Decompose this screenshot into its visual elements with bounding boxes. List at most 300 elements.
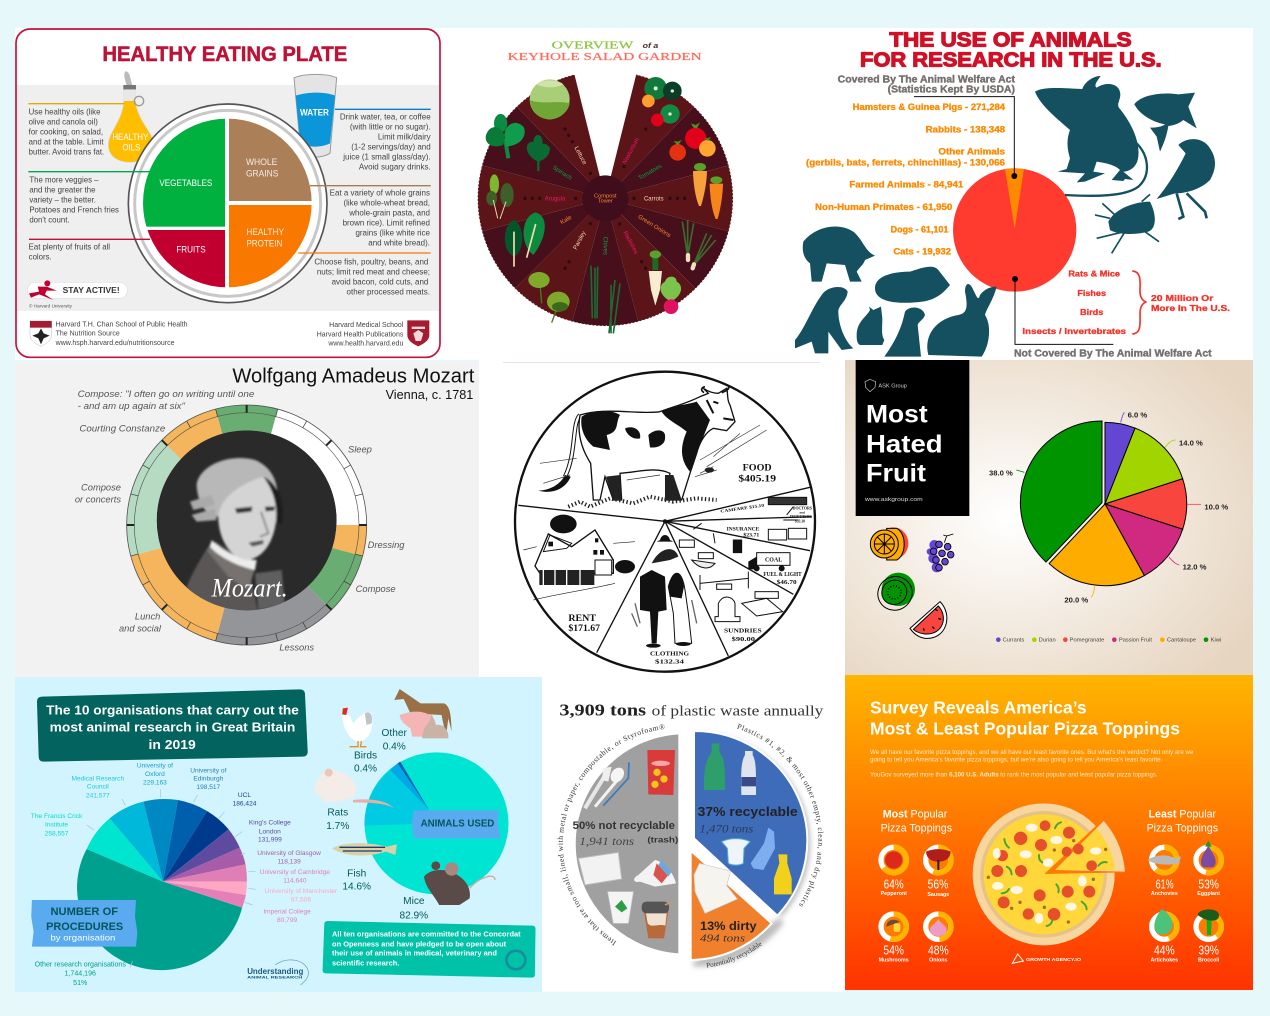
icon: kale	[505, 212, 545, 267]
title: overview: OVERVIEW	[552, 40, 634, 51]
pie chart: animals used	[364, 752, 508, 894]
pie labels: 1,941 tons	[579, 836, 635, 848]
stat: onions: 48%	[928, 942, 949, 957]
stat: eggplant: Eggplant	[1197, 891, 1220, 897]
label: number of procedures: by organisation	[50, 934, 115, 943]
labels: CLOTHING	[650, 650, 689, 657]
legend: Kiwi	[1211, 638, 1221, 644]
labels: $33.30	[795, 520, 805, 524]
covered list: Dogs - 61,101	[891, 224, 948, 234]
plant labels: Nasturtium	[622, 137, 641, 165]
curved caption: recyclable: Plastics #1, #2, & most other empty, clean, and dry plastics	[736, 724, 824, 907]
pie chart	[1020, 421, 1187, 586]
title bold part: 3,909 tons	[559, 701, 646, 720]
stay active badge: STAY ACTIVE!	[63, 285, 120, 295]
text: oils advice: for cooking, on salad,	[29, 127, 103, 136]
note box: scientific research.	[332, 959, 399, 968]
title: of a: of a	[643, 41, 658, 50]
activity labels: Dressing	[368, 540, 405, 550]
illustration: coal truck: COAL	[765, 557, 782, 563]
plate: HEALTHY	[246, 227, 284, 237]
stat: mushrooms: Mushrooms	[879, 957, 909, 963]
legend: Cantaloupe	[1167, 638, 1196, 644]
text: oils advice: olive and canola oil)	[29, 117, 98, 126]
organisation labels: 114,640	[283, 878, 307, 885]
icon: chives	[591, 266, 620, 333]
panel: animals in research	[795, 29, 1230, 360]
stat: artichokes: Artichokes	[1151, 957, 1178, 963]
text: water advice: Drink water, tea, or coffee	[340, 113, 431, 122]
icon: oil bottle	[108, 71, 153, 162]
covered list: Non-Human Primates - 61,950	[815, 202, 952, 212]
activity labels: or concerts	[75, 494, 121, 504]
pie labels: (trash)	[647, 835, 678, 845]
footer: medical school: Harvard Health Publications	[317, 331, 404, 338]
text: water advice: (1-2 servings/day) and	[351, 143, 431, 152]
pie value labels: 14.0 %	[1179, 439, 1203, 448]
organisation labels: Council	[87, 784, 109, 791]
icon: horse	[394, 689, 452, 737]
stat: pepperoni: 64%	[884, 876, 904, 891]
labels: $132.34	[655, 658, 685, 665]
footer: medical school: www.health.harvard.edu	[327, 341, 403, 348]
footer: medical school: Harvard Medical School	[329, 322, 404, 329]
title: Wolfgang Amadeus Mozart	[232, 365, 475, 388]
animal silhouettes	[795, 76, 1215, 357]
stat: pepperoni	[881, 847, 907, 897]
title line two: Most & Least Popular Pizza Toppings	[870, 718, 1180, 738]
intro text: going to tell you America's favorite pizza toppings, but we're also going to tell you America's least favorite.	[870, 758, 1163, 764]
labels: INSURANCE	[727, 528, 760, 533]
pie chart: procedures by organisation	[77, 789, 256, 970]
stat: artichokes: 44%	[1154, 942, 1175, 957]
plant labels: Tomatoes	[638, 164, 663, 182]
title: keyhole salad garden: KEYHOLE SALAD GARDEN	[508, 52, 702, 63]
black title card: Hated	[866, 431, 943, 458]
pie labels	[573, 805, 798, 945]
stat: anchovies	[1148, 847, 1181, 897]
curved caption: dirty: Potentially recyclable	[706, 942, 762, 968]
intro text: We all have our favorite pizza toppings, and we all have our least favorite ones. But what's the verdict? Not only are we	[870, 750, 1194, 756]
animal share labels: 82.9%	[399, 910, 428, 921]
stat: onions: Onions	[929, 957, 948, 963]
icon: watermelon	[910, 602, 947, 638]
text: oils advice: Use healthy oils (like	[29, 107, 100, 116]
organisation labels: University of	[190, 767, 227, 774]
legend	[996, 637, 1221, 644]
text: vegetables advice: variety – the better.	[29, 195, 96, 204]
icon: mouse	[1035, 76, 1147, 196]
uncovered list	[1022, 269, 1230, 336]
stat: anchovies: Anchovies	[1151, 891, 1178, 897]
plant labels	[545, 137, 671, 255]
text: water advice: juice (1 small glass/day).	[342, 153, 431, 162]
plant labels: Kale	[560, 215, 574, 226]
title line two: FOR RESEARCH IN THE U.S.	[860, 49, 1162, 72]
uncovered list: Rats & Mice	[1068, 269, 1120, 279]
footer: public health: Harvard T.H. Chan School of Public Health	[56, 321, 188, 328]
illustration: clothing	[632, 535, 697, 648]
uncovered list: More In The U.S.	[1151, 303, 1230, 313]
organisation labels: Institute	[45, 822, 68, 829]
understanding animal research logo	[247, 960, 308, 985]
text: grains advice: Eat a variety of whole grains	[330, 189, 430, 198]
panel: healthy eating plate	[16, 29, 440, 357]
heading: least popular: Least Popular	[1149, 808, 1216, 820]
animal share labels: Rats	[327, 808, 348, 819]
uncovered list: 20 Million Or	[1151, 293, 1214, 303]
panel: pizza toppings	[845, 675, 1253, 990]
icon: cutlery and straw	[585, 762, 629, 808]
footer: public health: www.hsph.harvard.edu/nutritionsource	[55, 340, 175, 347]
panel: uk animal research	[15, 677, 542, 992]
intro text: YouGov surveyed more than 6,100 U.S. Adults to rank the most popular and least popular pizza toppings.	[870, 772, 1158, 778]
organisation labels: The Francis Crick	[31, 813, 83, 820]
brace	[1132, 271, 1146, 334]
plant labels: Arugula	[545, 196, 566, 202]
organisation labels: University of	[137, 763, 173, 770]
intro text	[870, 750, 1194, 778]
plant labels: Parsley	[573, 230, 587, 251]
text: protein advice: other processed meats.	[347, 288, 430, 297]
plate: VEGETABLES	[159, 178, 212, 188]
text: protein advice: Choose fish, poultry, beans, and	[314, 258, 428, 267]
organisation labels: University of Glasgow	[257, 850, 321, 857]
animal share labels: 0.4%	[383, 741, 406, 752]
label: animals used	[412, 810, 501, 838]
organisation labels: UCL	[238, 792, 251, 799]
panel: family budget woodcut	[515, 372, 815, 672]
text: water advice: Avoid sugary drinks.	[359, 163, 431, 172]
labels: $171.67	[568, 623, 601, 633]
stat: onions	[926, 914, 951, 963]
plant labels: Radishes	[622, 230, 639, 255]
black title card: ASK Group	[878, 383, 907, 389]
text: oils advice: butter. Avoid trans fat.	[29, 148, 104, 157]
icon: monkey	[795, 287, 853, 353]
compost tower: Tower	[598, 199, 613, 205]
oil label line two: OILS	[122, 143, 140, 153]
label: number of procedures: PROCEDURES	[46, 921, 123, 933]
title rest: of plastic waste annually	[652, 704, 824, 720]
stat: broccoli	[1196, 909, 1221, 963]
plate: PROTEIN	[246, 238, 282, 248]
not covered caption: Not Covered By The Animal Welfare Act	[1014, 349, 1212, 360]
illustration: doctors and insurance props	[713, 497, 807, 553]
text: grains advice: grains (like white rice	[355, 229, 431, 238]
understanding animal research logo: Understanding	[247, 966, 303, 976]
icon: water glass: WATER	[300, 108, 329, 118]
title banner	[37, 689, 308, 762]
icon: grapes	[927, 534, 954, 572]
covered list: Hamsters & Guinea Pigs - 271,284	[853, 102, 1005, 112]
animal share labels: Fish	[347, 868, 366, 879]
heading: most popular: Pizza Toppings	[881, 822, 952, 834]
animal share labels: 1.7%	[326, 821, 349, 832]
compost tower	[582, 175, 628, 221]
text: vegetables advice: Potatoes and French fries	[29, 205, 119, 214]
stat: pepperoni: Pepperoni	[881, 891, 907, 897]
portrait of mozart: Mozart.	[211, 574, 288, 603]
icon: takeaway box	[694, 863, 737, 913]
organisation labels: 97,506	[291, 897, 311, 904]
icon: spinach	[486, 114, 550, 171]
stat: sausage: 56%	[928, 876, 948, 891]
shield: medical school	[407, 320, 429, 346]
icon: fish	[1134, 93, 1197, 152]
icon: yogurt	[722, 839, 750, 865]
pie labels: 50% not recyclable	[573, 820, 675, 832]
organisation labels: Other research organisations	[35, 962, 126, 969]
organisation labels: University of Manchester	[265, 888, 338, 895]
growth agency logo: GROWTH AGENCY.IO	[1026, 957, 1081, 963]
pie value labels	[989, 411, 1228, 605]
covered subtitle: (Statistics Kept By USDA)	[888, 85, 1015, 96]
stat: anchovies: 61%	[1156, 876, 1174, 891]
pie value labels: 10.0 %	[1204, 503, 1228, 512]
activity labels: Compose	[356, 584, 396, 594]
title banner: most animal research in Great Britain	[50, 720, 295, 735]
activity labels: Lessons	[279, 642, 314, 652]
curved caption: not recyclable: Items that are too small, lined with metal or paper, compostable, or Styrofoam®	[558, 724, 664, 946]
legend: Passion Fruit	[1119, 638, 1153, 644]
icon: water glass	[294, 74, 337, 157]
activity labels: Compose	[81, 482, 121, 492]
pie value labels: 6.0 %	[1128, 411, 1147, 420]
legend: Currants	[1003, 638, 1025, 644]
labels: $46.70	[777, 579, 797, 586]
pie outline and dividers	[515, 372, 815, 672]
labels: $405.19	[738, 474, 777, 484]
stat: eggplant	[1196, 841, 1221, 897]
stat: mushrooms	[879, 914, 909, 963]
label: number of procedures: NUMBER OF	[50, 906, 118, 918]
labels: DENTISTS	[790, 515, 812, 519]
icon: cup	[608, 892, 633, 923]
pie shadow	[693, 733, 810, 967]
organisation labels: Imperial College	[263, 909, 311, 916]
icon: fly	[1095, 194, 1159, 253]
icon: tomatoes	[669, 122, 716, 161]
black title card	[856, 360, 969, 516]
organisation labels: University of Cambridge	[260, 869, 330, 876]
stay active badge	[28, 280, 127, 300]
plant labels: Lettuce	[573, 146, 587, 167]
covered list: Farmed Animals - 84,941	[849, 180, 963, 190]
pie leaders	[1016, 412, 1201, 597]
uncovered list: Fishes	[1077, 288, 1106, 298]
black title card: Fruit	[866, 461, 926, 488]
icon: kiwi	[872, 570, 918, 616]
text: vegetables advice: don't count.	[29, 215, 70, 224]
labels: $23.71	[743, 534, 760, 539]
heading: most popular: Most Popular	[883, 808, 947, 820]
icon: chicken	[342, 708, 372, 747]
text: grains advice: (like whole-wheat bread,	[343, 199, 430, 208]
icon: dog	[884, 308, 925, 357]
covered subtitle: Covered By The Animal Welfare Act	[838, 74, 1016, 85]
activity labels: Courting Constanze	[79, 423, 165, 433]
stat: eggplant: 53%	[1198, 876, 1219, 891]
plate: WHOLE	[246, 157, 277, 167]
activity labels: and social	[119, 623, 162, 633]
heading: least popular: Pizza Toppings	[1147, 822, 1218, 834]
text: grains advice: and white bread).	[368, 239, 430, 248]
organisation labels: 80,799	[277, 917, 298, 924]
activity labels: Compose: "I often go on writing until one	[78, 389, 254, 399]
title line one: THE USE OF ANIMALS	[889, 29, 1132, 52]
plate: GRAINS	[246, 169, 278, 179]
panel: plastic waste	[542, 677, 845, 992]
icon: chip bag	[647, 750, 675, 795]
covered list: Other Animals	[938, 146, 1005, 156]
icon: mouse	[424, 861, 495, 905]
icon: orange	[870, 527, 908, 560]
icon: cat	[857, 307, 884, 345]
labels: FUEL & LIGHT	[763, 572, 802, 578]
icon: mustard bottle	[774, 854, 792, 894]
title: HEALTHY EATING PLATE	[102, 42, 347, 66]
organisation labels: Edinburgh	[193, 776, 224, 783]
understanding animal research logo: ANIMAL RESEARCH	[247, 974, 302, 979]
text: water advice: Limit milk/dairy	[378, 133, 431, 142]
activity labels: Sleep	[348, 444, 372, 454]
icon: rat	[314, 769, 394, 808]
pizza	[973, 803, 1125, 945]
pie chart	[575, 731, 807, 960]
title banner: The 10 organisations that carry out the	[46, 702, 299, 717]
icon: guinea pig	[875, 267, 950, 303]
legend: Pomegranate	[1070, 638, 1104, 644]
panel: most hated fruit	[845, 360, 1253, 675]
organisation labels: 241,577	[86, 792, 110, 799]
illustration: cow	[538, 387, 767, 507]
plant labels: Chives	[601, 237, 607, 255]
labels: FOOD	[743, 463, 772, 473]
animal share labels	[326, 728, 428, 921]
stat: mushrooms: 54%	[883, 942, 904, 957]
icon: rabbit	[927, 284, 997, 357]
panel: keyhole salad garden	[478, 40, 733, 333]
organisation labels: 186,424	[233, 800, 257, 807]
stat: artichokes	[1151, 909, 1178, 963]
labels: DOCTORS	[793, 506, 812, 510]
text: protein advice: nuts; limit red meat and cheese;	[317, 268, 430, 277]
uncovered list: Insects / Invertebrates	[1022, 326, 1126, 336]
icon: water bottle	[741, 751, 756, 795]
pie chart	[914, 97, 1113, 344]
text: grains advice: brown rice). Limit refined	[343, 219, 430, 228]
place and date: Vienna, c. 1781	[386, 388, 473, 402]
icon: parsnip and radish	[649, 250, 681, 314]
animal share labels: Birds	[354, 750, 377, 761]
organisation labels: London	[259, 828, 281, 835]
organisation labels: 229,163	[143, 780, 167, 787]
organisation labels: Medical Research	[71, 775, 124, 782]
covered list	[806, 102, 1005, 256]
text: grains advice: whole-grain pasta, and	[348, 209, 430, 218]
icon: pig	[400, 712, 436, 737]
uncovered list: Birds	[1080, 307, 1104, 317]
title line one: Survey Reveals America’s	[870, 697, 1087, 717]
icon: pig	[803, 226, 875, 282]
activity labels	[75, 389, 405, 652]
pie value labels: 20.0 %	[1064, 596, 1088, 605]
icon: rabbit	[422, 713, 448, 738]
copyright: © Harvard University	[29, 303, 73, 309]
organisation labels: 51%	[73, 980, 87, 987]
activity labels: Lunch	[135, 611, 160, 621]
pie value labels: 38.0 %	[989, 468, 1013, 477]
uk research content	[31, 689, 536, 987]
icon: detergent bottle	[704, 743, 725, 790]
icon: toothpaste tube	[634, 860, 676, 887]
note box: their use of animals in medical, veterinary and	[332, 949, 497, 958]
stat: sausage: Sausage	[927, 892, 949, 898]
shield: public health	[30, 321, 52, 346]
organisation labels: 198,517	[196, 784, 221, 791]
icon: arugula	[486, 174, 514, 219]
icon: carrots	[693, 163, 723, 219]
icon: nasturtium	[642, 77, 682, 126]
icon: crushed bottle	[751, 828, 775, 870]
organisation labels: Oxford	[145, 771, 165, 778]
labels: SUNDRIES	[724, 628, 762, 635]
animal share labels: Mice	[403, 896, 425, 907]
note box: on Openness and have pledged to be open about	[332, 939, 507, 948]
organisation labels: 131,999	[258, 837, 282, 844]
icon: tray	[578, 852, 622, 885]
plate: FRUITS	[176, 245, 206, 255]
illustration: sundries	[679, 540, 783, 622]
icon: parsley	[528, 272, 570, 323]
pie value labels: 12.0 %	[1183, 562, 1207, 571]
illustration: house	[523, 515, 635, 600]
icon: lettuce	[530, 79, 570, 119]
text: water advice: (with little or no sugar).	[350, 123, 431, 132]
clock ring chart	[127, 405, 367, 645]
animal share labels: Other	[382, 728, 408, 739]
stat: broccoli: Broccoli	[1198, 957, 1220, 963]
label: number of procedures	[31, 900, 137, 947]
labels: CAMFARE $15.10	[720, 503, 764, 514]
growth agency logo	[1012, 954, 1081, 963]
organisation labels: 258,557	[45, 830, 69, 837]
stat: sausage	[926, 847, 951, 898]
text: oils advice: and at the table. Limit	[29, 137, 104, 146]
compost tower: Compost	[594, 194, 617, 200]
footer: public health: The Nutrition Source	[56, 331, 120, 338]
black title card: Most	[866, 401, 928, 428]
organisation labels: 118,139	[277, 859, 301, 866]
icon: zebrafish	[332, 843, 397, 855]
pie labels: 37% recyclable	[698, 805, 798, 819]
panel: mozart daily routine	[15, 362, 479, 677]
organisation labels: 1,744,196	[64, 971, 96, 978]
icon: coffee cup	[642, 901, 673, 938]
animal share labels: 14.6%	[342, 882, 371, 893]
covered list: Cats - 19,932	[893, 246, 951, 256]
text: fruits advice: colors.	[29, 253, 52, 262]
note box: All ten organisations are committed to the Concordat	[332, 930, 521, 939]
labels	[568, 463, 812, 665]
plant labels: Spinach	[551, 165, 573, 182]
plate	[128, 104, 327, 303]
wedge chart	[478, 74, 733, 326]
plant labels: Green Onions	[637, 214, 671, 239]
illustration: coal truck	[748, 553, 790, 571]
plant labels: Carrots	[644, 196, 664, 202]
